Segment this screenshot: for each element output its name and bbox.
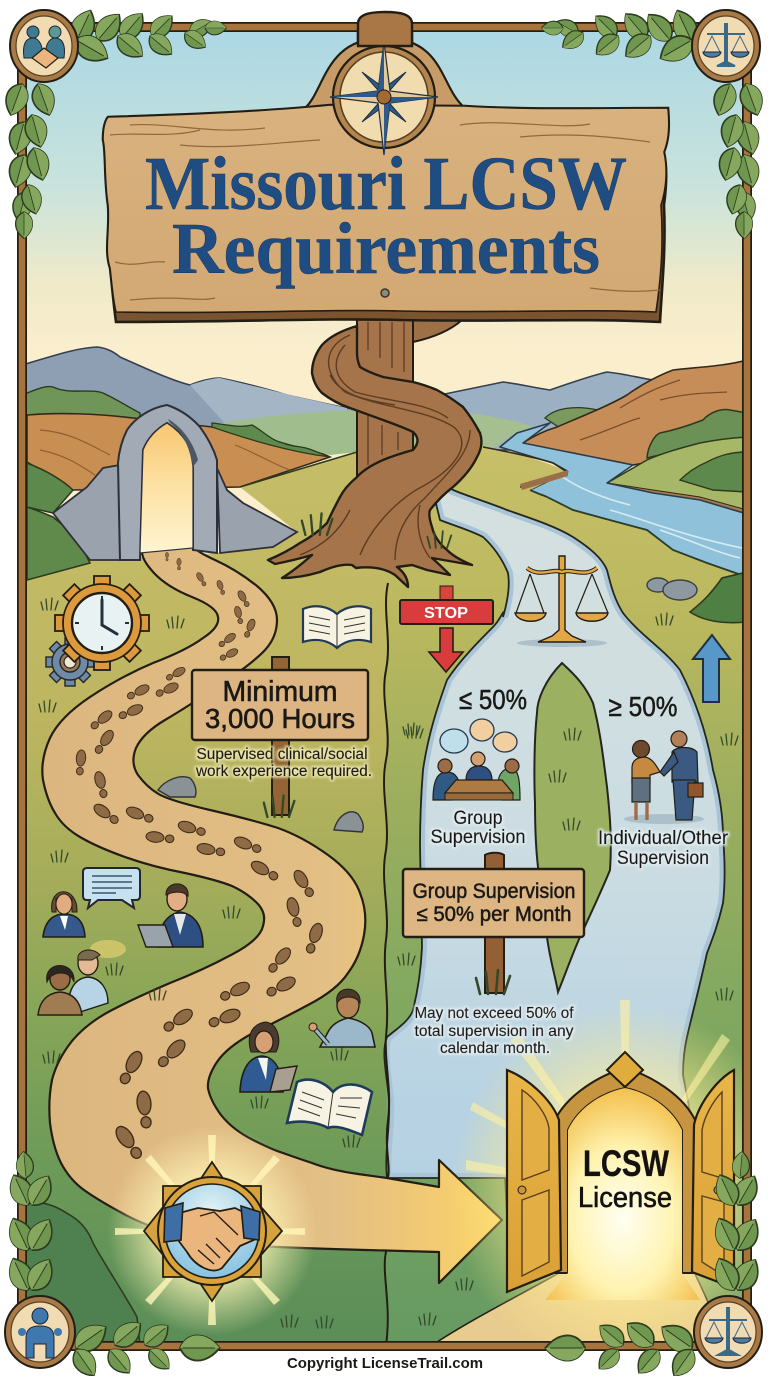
woman with tablet bbox=[240, 1022, 297, 1092]
large gear bbox=[55, 576, 149, 670]
sky bbox=[22, 27, 747, 527]
sign text: ≤ 50% per Month bbox=[416, 903, 572, 926]
people: mentor conversation bbox=[38, 868, 375, 1135]
hours caption: Supervised clinical/social bbox=[196, 746, 368, 763]
right door bbox=[692, 1070, 734, 1288]
individual supervision percentage: ≥ 50% bbox=[608, 691, 678, 722]
corner medallion: person with group bbox=[5, 1296, 75, 1368]
opening light bbox=[545, 1088, 700, 1300]
twisted trunk bbox=[268, 326, 481, 587]
vine garland top-left bbox=[1, 6, 226, 238]
rolling hills and fields bbox=[22, 360, 747, 520]
stop sign with down arrow bbox=[400, 586, 493, 672]
trunk end behind post bbox=[413, 320, 462, 342]
river bbox=[500, 423, 747, 577]
title: Requirements bbox=[172, 208, 600, 289]
left bush cluster bbox=[27, 507, 90, 580]
arch frame bbox=[554, 1068, 696, 1273]
orange field left bbox=[27, 414, 330, 490]
handshake medallion bbox=[107, 1126, 317, 1336]
sign: minimum 3,000 hours bbox=[192, 657, 368, 815]
icon: compass bbox=[330, 42, 438, 155]
right bush bbox=[647, 409, 747, 458]
meadow ground left bbox=[22, 452, 388, 1346]
sign board bbox=[403, 869, 584, 937]
sign text bbox=[412, 880, 576, 926]
sign text: Minimum bbox=[222, 676, 338, 708]
group supervision label: Group bbox=[454, 807, 503, 829]
two colleagues bbox=[38, 940, 126, 1015]
distant mountains bbox=[22, 347, 653, 450]
green bank near river bbox=[470, 414, 533, 448]
sign board bbox=[192, 670, 368, 740]
arch diamond bbox=[607, 1052, 643, 1087]
icon: open book upper bbox=[303, 606, 371, 648]
corner medallion: scales top-right bbox=[692, 10, 760, 82]
corner medallion: handshake people bbox=[10, 10, 78, 82]
supervision note: total supervision in any bbox=[414, 1023, 574, 1040]
vine garland top-right bbox=[542, 6, 767, 238]
compass mount bbox=[305, 38, 465, 108]
clasped hands bbox=[172, 1208, 258, 1270]
small bush right bbox=[680, 452, 747, 492]
license text: LCSW bbox=[583, 1143, 669, 1184]
trunk grain bbox=[300, 335, 470, 560]
rocks beside hours sign bbox=[158, 777, 363, 832]
group supervision percentage: ≤ 50% bbox=[459, 684, 527, 715]
stone archway with glowing opening bbox=[53, 405, 297, 560]
sign text: 3,000 Hours bbox=[205, 703, 355, 734]
hours caption bbox=[195, 746, 372, 780]
rocks near the river bbox=[647, 578, 697, 600]
supervision note bbox=[414, 1005, 574, 1057]
vine garland bottom-left bbox=[3, 1151, 220, 1376]
supervision river-road with fork bbox=[384, 486, 724, 1270]
vine garland bottom-right bbox=[545, 1151, 765, 1376]
license doorway bbox=[507, 1052, 734, 1300]
group supervision label bbox=[430, 807, 526, 848]
icon: two people shaking hands bbox=[624, 731, 704, 824]
stop sign with down arrow: STOP bbox=[424, 605, 468, 622]
open book lower bbox=[287, 1080, 372, 1135]
glow bbox=[107, 1126, 317, 1336]
star frame bbox=[144, 1162, 282, 1301]
blue up arrow bbox=[693, 635, 730, 702]
river highlights bbox=[560, 475, 742, 558]
right bush line bbox=[545, 408, 598, 428]
individual supervision label bbox=[598, 827, 728, 869]
post lower section bbox=[357, 318, 413, 480]
glow around the license door bbox=[450, 1000, 768, 1375]
group supervision label: Supervision bbox=[430, 826, 526, 848]
wavy divider line bbox=[384, 583, 389, 1346]
right bush bbox=[690, 572, 747, 623]
light path below the door bbox=[437, 1274, 708, 1341]
corner medallion: scales bottom-right bbox=[694, 1296, 762, 1368]
left door bbox=[507, 1070, 561, 1292]
individual supervision label: Individual/Other bbox=[598, 827, 728, 849]
copyright footer: Copyright LicenseTrail.com bbox=[287, 1355, 483, 1372]
footprints along the path bbox=[75, 552, 325, 1161]
supervision note: calendar month. bbox=[440, 1040, 550, 1057]
grass island inside the fork bbox=[534, 663, 611, 992]
sign text bbox=[205, 676, 355, 734]
orange field right bbox=[523, 360, 747, 465]
individual supervision label: Supervision bbox=[617, 847, 709, 869]
green hill behind tree bbox=[212, 410, 420, 455]
meadow ground right bbox=[386, 440, 747, 1346]
hours caption: work experience required. bbox=[195, 763, 372, 780]
woman seated bbox=[43, 892, 85, 937]
icon: scales of justice bbox=[515, 556, 608, 647]
sign: group supervision limit bbox=[403, 853, 584, 993]
license text: License bbox=[578, 1182, 672, 1214]
green hill right bbox=[608, 436, 742, 508]
title: Missouri LCSW bbox=[145, 142, 627, 226]
man with laptop bbox=[138, 884, 203, 947]
title sign board bbox=[103, 105, 669, 322]
license text bbox=[578, 1143, 672, 1214]
post top over frame bbox=[358, 12, 412, 46]
twisted tree trunk around the signpost bbox=[268, 318, 481, 587]
speech bubble bbox=[83, 868, 140, 908]
sandy footpath with arrow to the license bbox=[42, 545, 502, 1283]
supervision note: May not exceed 50% of bbox=[414, 1005, 574, 1022]
man pointing bbox=[309, 989, 375, 1047]
signpost top bbox=[356, 32, 414, 42]
grass tufts bbox=[39, 598, 738, 1328]
far green band left bbox=[22, 387, 140, 420]
icon: clock and gears bbox=[46, 576, 149, 686]
sign post bbox=[485, 853, 504, 993]
title bbox=[145, 142, 627, 289]
small gear bbox=[46, 638, 94, 686]
sign post bbox=[272, 657, 289, 815]
bottom-left bush bbox=[22, 1198, 140, 1346]
icon: group at table with speech bubbles bbox=[433, 719, 520, 800]
sign text: Group Supervision bbox=[412, 880, 576, 903]
dark bush left bbox=[27, 463, 73, 513]
